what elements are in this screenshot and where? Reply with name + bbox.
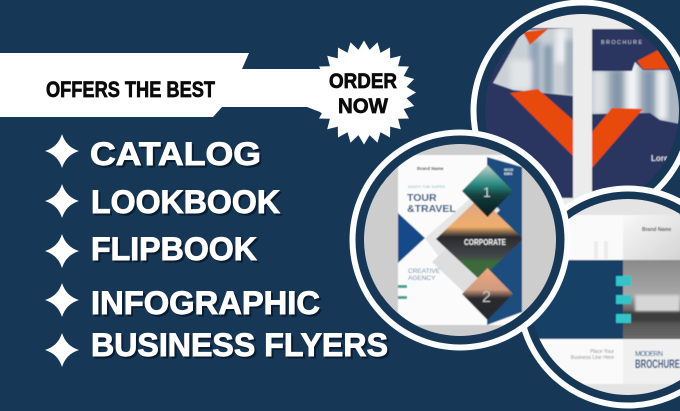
circle: modern brochure spread: Place Your: [590, 349, 614, 355]
circle: tour and travel flyer: CREATIVE: [408, 268, 441, 275]
circle: modern brochure spread: [520, 188, 680, 406]
list item: catalog: [45, 134, 263, 174]
banner ribbon: [0, 53, 325, 117]
list item: infographic: INFOGRAPHIC: [93, 287, 322, 323]
list item: catalog: CATALOG: [90, 136, 261, 172]
circle: brochure with orange chevrons: BROCHURE: [601, 40, 642, 46]
circle: tour and travel flyer: AGENCY: [408, 275, 436, 282]
circle: tour and travel flyer: 2: [482, 289, 491, 306]
order now starburst badge: ORDER: [329, 70, 397, 93]
circle: brochure with orange chevrons: [470, 0, 680, 206]
circle: tour and travel flyer: ENJOY THE SUPER: [408, 184, 445, 189]
circle: tour and travel flyer: [352, 132, 568, 348]
circle: tour and travel flyer: CORPORATE: [464, 237, 506, 247]
circle: tour and travel flyer: 1: [483, 184, 491, 200]
list item: lookbook: LOOKBOOK: [93, 186, 282, 222]
order now starburst badge: [312, 40, 416, 144]
list item: catalog: CATALOG: [92, 138, 263, 174]
banner heading: OFFERS THE BEST: [46, 77, 215, 102]
circle: modern brochure spread: Brand Name: [642, 227, 672, 233]
circle: tour and travel flyer: MOD: [504, 167, 513, 172]
circle: tour and travel flyer: TOUR: [407, 192, 437, 204]
circle: tour and travel flyer: Brand Name: [417, 166, 444, 171]
list item: business flyers: BUSINESS FLYERS: [91, 327, 388, 363]
circle: brochure with orange chevrons: Lore: [651, 154, 669, 163]
circle: modern brochure spread: Business Line Here: [571, 355, 614, 361]
circle: tour and travel flyer: EBN: [504, 171, 513, 176]
circle: modern brochure spread: MODERN: [635, 351, 663, 358]
list item: infographic: INFOGRAPHIC: [91, 285, 320, 321]
order now starburst badge: NOW: [338, 95, 388, 118]
list item: business flyers: BUSINESS FLYERS: [93, 329, 390, 365]
list item: flipbook: FLIPBOOK: [93, 233, 259, 269]
circle: tour and travel flyer: &TRAVEL: [407, 203, 456, 215]
list item: flipbook: FLIPBOOK: [91, 231, 257, 267]
list item: lookbook: LOOKBOOK: [91, 184, 280, 220]
